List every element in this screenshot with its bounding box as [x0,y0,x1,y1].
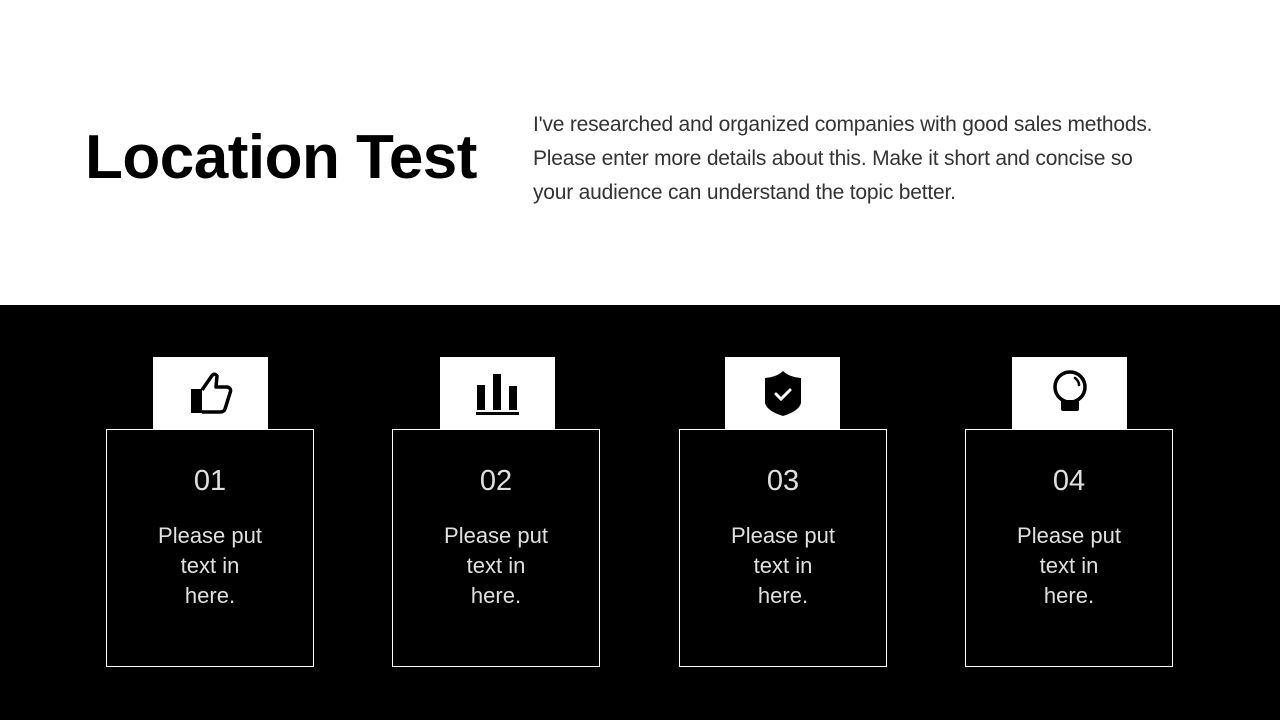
description text: I've researched and organized companies with good sales methods. [533,113,1152,136]
card 02: 02 [480,465,512,497]
card 02: text in [467,553,525,578]
card 03: text in [754,553,812,578]
card 01: here. [185,583,235,608]
description text [533,113,1152,204]
description text: Please enter more details about this. Make it short and concise so [533,147,1133,170]
card 02: Please put [444,523,548,548]
card 04: Please put [1017,523,1121,548]
card 01: text in [181,553,239,578]
description text: your audience can understand the topic better. [533,181,956,204]
card 02 [392,357,600,667]
card 04: 04 [1053,465,1085,497]
icon: bar chart [440,357,555,429]
title: Location Test [85,123,477,192]
icon: thumbs up [153,357,268,429]
black panel [0,305,1280,720]
card 04: text in [1040,553,1098,578]
icon: shield check [725,357,840,429]
icon: light bulb [1012,357,1127,429]
card 03 [679,357,887,667]
card 01: Please put [158,523,262,548]
card 01: 01 [194,465,226,497]
card 03: Please put [731,523,835,548]
card 01 [106,357,314,667]
card 04: here. [1044,583,1094,608]
card 02: here. [471,583,521,608]
card 03: 03 [767,465,799,497]
card 03: here. [758,583,808,608]
card 04 [965,357,1173,667]
